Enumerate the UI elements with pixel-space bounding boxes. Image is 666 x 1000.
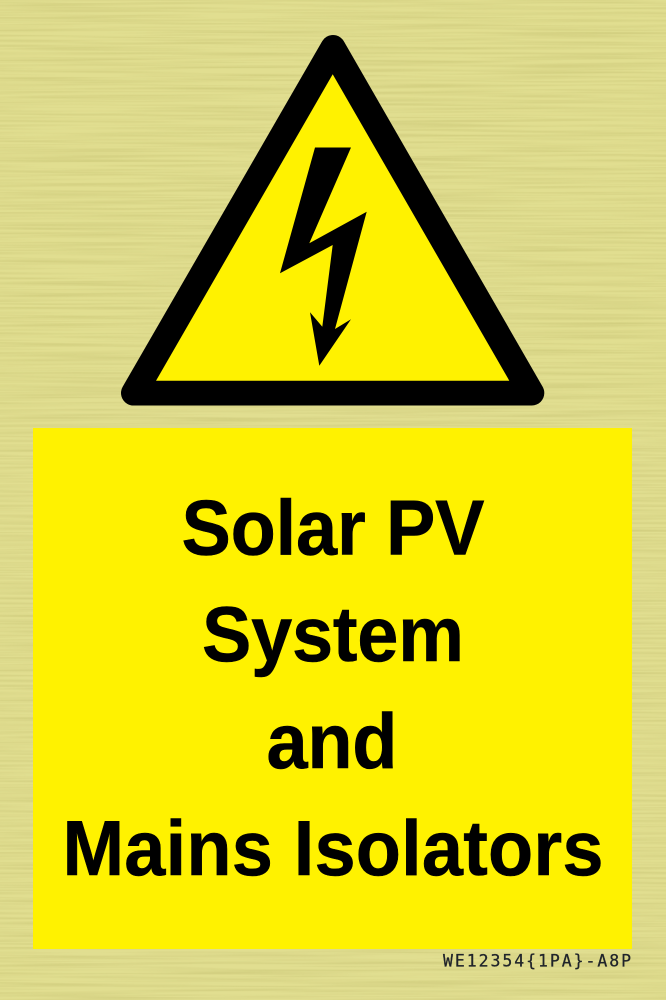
lightning bolt	[280, 148, 367, 366]
sign text	[62, 485, 604, 892]
triangle black border	[134, 48, 532, 393]
triangle yellow fill	[156, 74, 509, 381]
line: Solar PV: Solar PV	[182, 485, 485, 572]
warning triangle icon	[134, 48, 532, 393]
line: Mains Isolators: Mains Isolators	[62, 805, 604, 892]
product code: WE12354{1PA}-A8P	[443, 952, 631, 970]
line: and: and	[266, 698, 398, 785]
yellow text panel	[33, 428, 632, 949]
line: System: System	[202, 591, 464, 678]
